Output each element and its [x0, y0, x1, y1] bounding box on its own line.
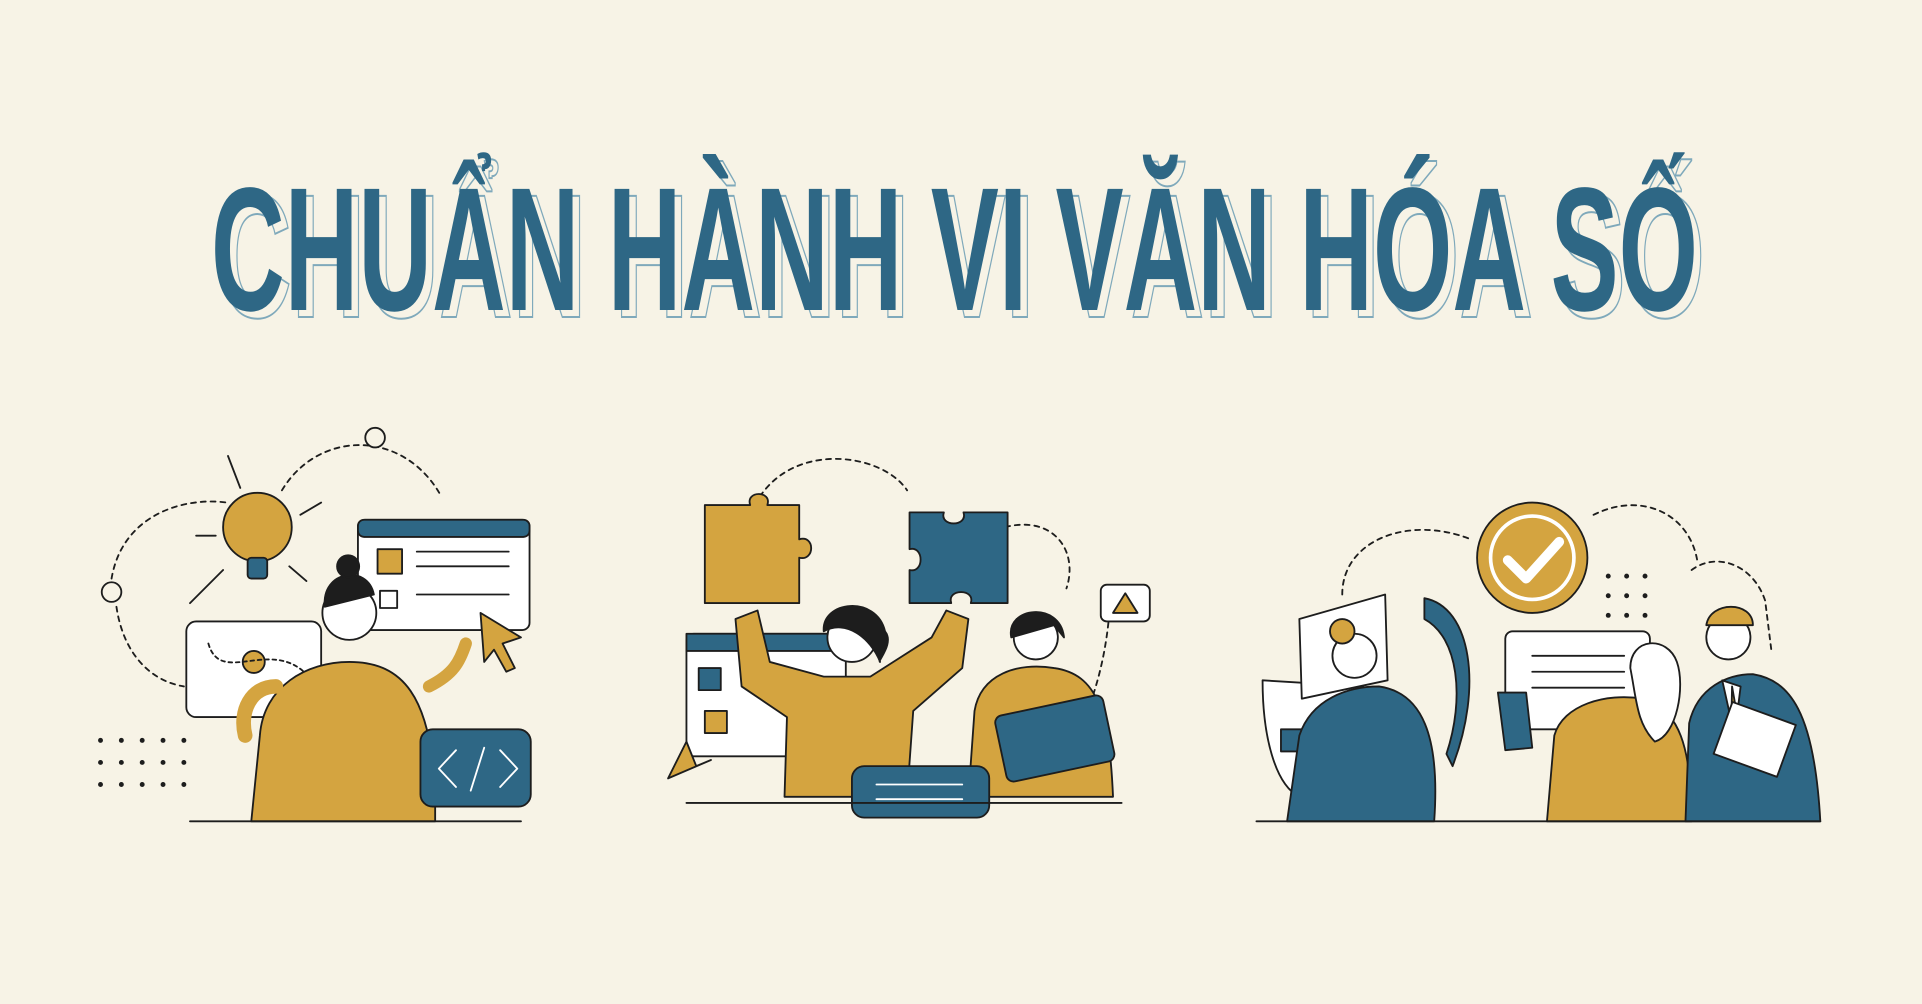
woman left — [1287, 619, 1435, 821]
monitor — [1498, 631, 1650, 750]
scene 3: business check — [1256, 503, 1820, 821]
browser window — [358, 520, 530, 672]
card with map — [186, 621, 321, 717]
scene 1: woman with ideas — [98, 428, 531, 821]
dots — [1606, 574, 1647, 618]
triangle icon — [1101, 585, 1150, 621]
dots — [98, 738, 186, 787]
keyboard bar — [852, 766, 989, 818]
code box — [420, 729, 531, 807]
window — [668, 634, 846, 778]
woman with tablet — [968, 612, 1116, 797]
icon: puzzle blue — [910, 512, 1008, 603]
icon: check badge — [1477, 503, 1587, 613]
woman — [244, 555, 466, 821]
icon: light bulb — [190, 456, 321, 603]
curved screens — [1263, 595, 1469, 797]
man — [1685, 607, 1820, 821]
woman with puzzles — [735, 606, 968, 797]
scene 2: puzzle team — [668, 459, 1150, 818]
icon: puzzle yellow — [705, 494, 811, 603]
woman yellow — [1547, 643, 1692, 821]
